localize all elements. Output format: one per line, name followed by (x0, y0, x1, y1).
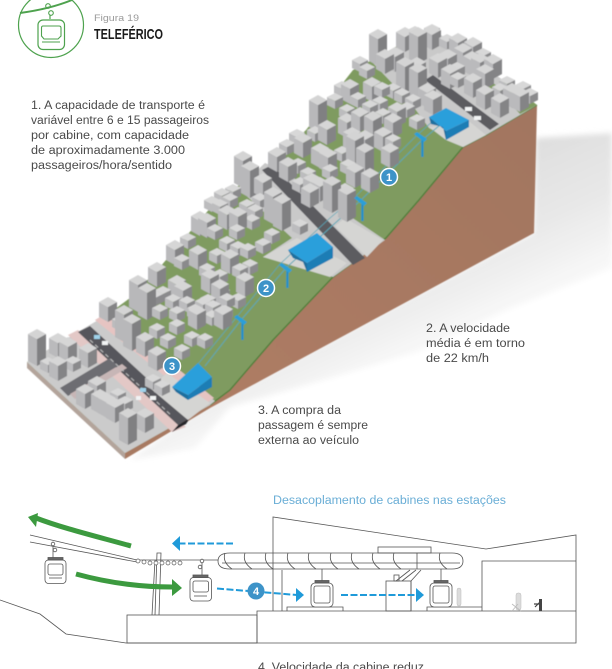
text block: speed note: de 22 km/h (426, 353, 489, 365)
isometric hillside illustration (27, 24, 538, 459)
marker 1: 1 (386, 172, 392, 184)
marker 1 (380, 168, 398, 186)
marker 2: 2 (263, 283, 269, 295)
cabin: at station right (430, 569, 452, 607)
station diagram linework (0, 517, 576, 643)
street and sidewalks: lower (60, 312, 214, 432)
arrow: blue dashed in station (341, 588, 424, 602)
station 3 (172, 363, 212, 400)
terrain: brown cut side (210, 105, 537, 408)
station 2 (288, 233, 333, 272)
text block: ticket note: 3. A compra da (258, 405, 342, 417)
heading: figure number: Figura 19 (94, 13, 139, 24)
cabin: at station left (311, 569, 333, 607)
terrain: green hill surface (27, 28, 537, 453)
text block: capacity note: passageiros/hora/sentido (31, 160, 172, 172)
pylons (234, 132, 427, 340)
marker 4: 4 (253, 586, 260, 598)
text block: speed note: 2. A velocidade (426, 323, 510, 335)
street: middle (262, 165, 365, 265)
cabin: approaching (190, 559, 212, 601)
marker 2 (258, 280, 274, 296)
text block: capacity note: 1. A capacidade de transporte é (31, 100, 205, 112)
cabin: on cable (45, 542, 66, 584)
street: upper (425, 75, 499, 130)
heading: decoupling diagram: Desacoplamento de cabines nas estações (273, 495, 506, 507)
text block: speed note (426, 323, 525, 365)
arrow: green outgoing (28, 513, 131, 546)
arrow: green incoming (76, 574, 182, 596)
marker 3 (164, 358, 180, 374)
marker 4 (248, 582, 264, 600)
terrain: base edge (27, 362, 210, 459)
station 1 (429, 108, 469, 140)
marker 3: 3 (169, 361, 175, 373)
text block: speed note: média é em torno (426, 338, 525, 350)
text block: ticket note: passagem é sempre (258, 420, 368, 432)
terrain: dark green edge (210, 105, 537, 405)
icon: cable car badge (18, 0, 84, 58)
cars upper (465, 107, 481, 120)
cable rollers (136, 559, 182, 565)
text block: capacity note: variável entre 6 e 15 passageiros (31, 115, 209, 127)
text block: ticket note (258, 405, 368, 447)
text block: capacity note: por cabine, com capacidade (31, 130, 189, 142)
text block: capacity note (31, 100, 209, 172)
concrete platforms (150, 122, 486, 420)
arrow: blue dashed incoming (217, 588, 304, 602)
heading: title: TELEFÉRICO (94, 26, 163, 43)
terrain shadow (130, 133, 612, 460)
flat urban block: middle (238, 163, 385, 277)
cars lower (94, 335, 156, 400)
buildings (28, 24, 538, 445)
text block: capacity note: de aproximadamente 3.000 (31, 145, 185, 157)
people and turnstile (457, 588, 542, 611)
arrow: blue dashed outgoing (172, 536, 233, 551)
green patches upper block (470, 70, 537, 114)
cable line (205, 125, 440, 366)
text block: ticket note: externa ao veículo (258, 435, 359, 447)
flat urban block: lower (27, 316, 215, 453)
flat urban block: upper (372, 27, 537, 147)
